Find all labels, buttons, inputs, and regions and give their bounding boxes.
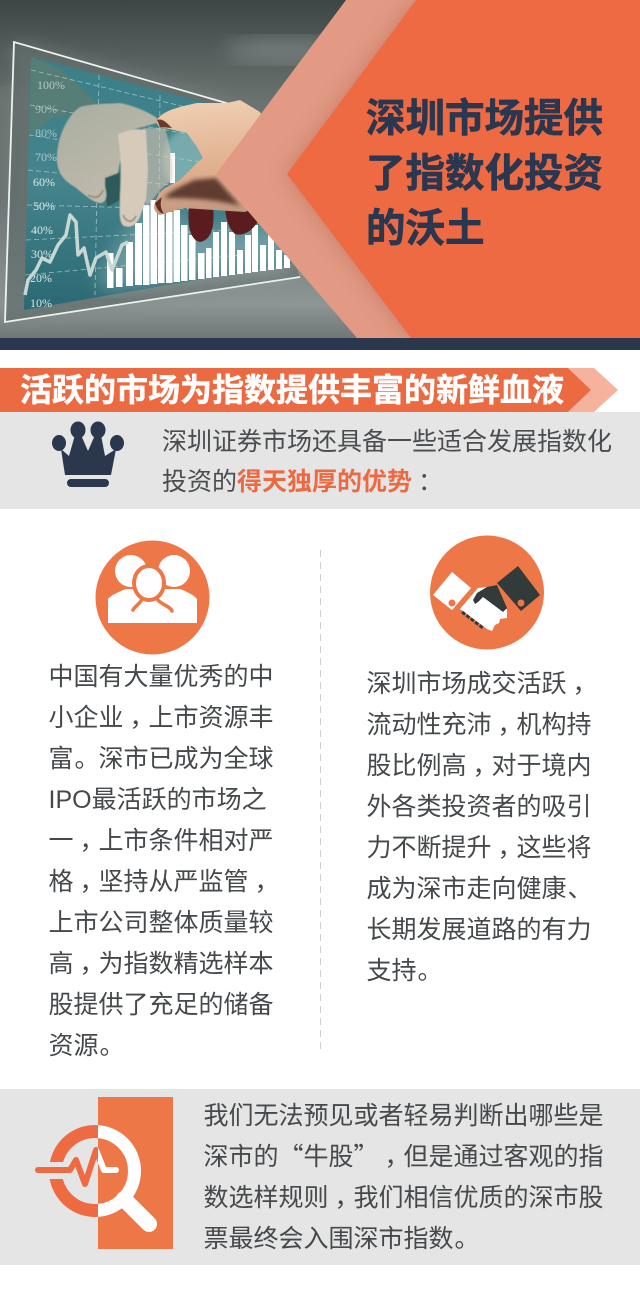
text: left column: 小企业，上市资源丰 bbox=[48, 704, 274, 732]
conclusion text: “ bbox=[279, 1137, 304, 1173]
chevron inner shadow bbox=[285, 0, 416, 338]
line chart bbox=[25, 215, 128, 295]
intro text: 投资的得天独厚的优势： bbox=[162, 468, 443, 496]
pointing hand bbox=[154, 100, 261, 242]
intro text: 深圳证券市场还具备一些适合发展指数化 bbox=[162, 428, 612, 456]
glowing screen frame bbox=[5, 42, 300, 322]
axis percentage labels: 100% bbox=[37, 78, 65, 92]
axis percentage labels: 10% bbox=[30, 296, 52, 310]
axis percentage labels: 30% bbox=[31, 247, 53, 261]
text: left column: 富。深市已成为全球 bbox=[48, 744, 274, 772]
text: right column: 深圳市场成交活跃， bbox=[366, 670, 598, 698]
photo background bbox=[0, 0, 357, 338]
axis percentage labels bbox=[30, 78, 65, 310]
conclusion text bbox=[204, 1102, 604, 1253]
column divider bbox=[320, 550, 321, 1050]
text: right column: 力不断提升，这些将 bbox=[366, 834, 592, 862]
conclusion text: 深市的 牛股 ，但是通过客观的指 bbox=[204, 1143, 604, 1171]
text: left column: 一，上市条件相对严 bbox=[48, 826, 274, 854]
banner arrow shape bbox=[0, 368, 618, 412]
conclusion text: 票最终会入围深市指数。 bbox=[204, 1225, 480, 1253]
banner heading: 活跃的市场为指数提供丰富的新鲜血液 bbox=[20, 372, 564, 408]
axis percentage labels: 50% bbox=[33, 199, 55, 213]
salmon chevron bbox=[216, 0, 416, 338]
text: left column: 格，坚持从严监管， bbox=[48, 868, 280, 896]
text: right column: 成为深市走向健康、 bbox=[366, 874, 593, 902]
orange chevron bbox=[287, 0, 640, 338]
text: right column: 外各类投资者的吸引 bbox=[366, 792, 592, 820]
text: right column bbox=[366, 670, 598, 984]
header image panel bbox=[0, 0, 640, 350]
text: left column: 高，为指数精选样本 bbox=[48, 950, 274, 978]
title: 了指数化投资 bbox=[366, 152, 603, 196]
icon: people bbox=[96, 540, 210, 654]
panel: intro bbox=[0, 412, 640, 509]
title: 的沃土 bbox=[366, 207, 484, 251]
icon: handshake bbox=[430, 536, 544, 650]
translucent hand bbox=[57, 103, 173, 227]
icon: crown bbox=[52, 422, 124, 487]
icon: magnifier with pulse bbox=[35, 1097, 173, 1249]
text: left column: 上市公司整体质量较 bbox=[48, 908, 274, 936]
intro text bbox=[162, 428, 612, 496]
navy bar bbox=[0, 338, 640, 350]
text: left column: 资源。 bbox=[48, 1032, 125, 1060]
axis percentage labels: 20% bbox=[30, 271, 52, 285]
white bar chart bbox=[107, 153, 290, 288]
axis percentage labels: 80% bbox=[35, 126, 57, 140]
text: left column bbox=[48, 662, 280, 1060]
text: right column: 支持。 bbox=[366, 956, 443, 984]
axis percentage labels: 90% bbox=[35, 102, 57, 116]
axis percentage labels: 40% bbox=[31, 223, 53, 237]
title bbox=[366, 97, 603, 251]
axis percentage labels: 70% bbox=[35, 150, 57, 164]
section banner bbox=[0, 368, 618, 412]
bar chart glow bbox=[100, 205, 290, 290]
conclusion text: 数选样规则，我们相信优质的深市股 bbox=[204, 1184, 604, 1212]
text: left column: 中国有大量优秀的中 bbox=[48, 662, 274, 690]
text: left column: 股提供了充足的储备 bbox=[48, 990, 274, 1018]
conclusion text: 我们无法预见或者轻易判断出哪些是 bbox=[204, 1102, 604, 1130]
conclusion text: ” bbox=[354, 1137, 379, 1173]
panel: conclusion bbox=[0, 1089, 640, 1265]
text: right column: 股比例高，对于境内 bbox=[366, 752, 592, 780]
axis percentage labels: 60% bbox=[33, 175, 55, 189]
text: right column: 长期发展道路的有力 bbox=[366, 916, 592, 944]
text: right column: 流动性充沛，机构持 bbox=[366, 710, 592, 738]
chart screen bbox=[24, 57, 300, 310]
text: left column: IPO最活跃的市场之 bbox=[48, 786, 267, 814]
title: 深圳市场提供 bbox=[366, 97, 603, 141]
